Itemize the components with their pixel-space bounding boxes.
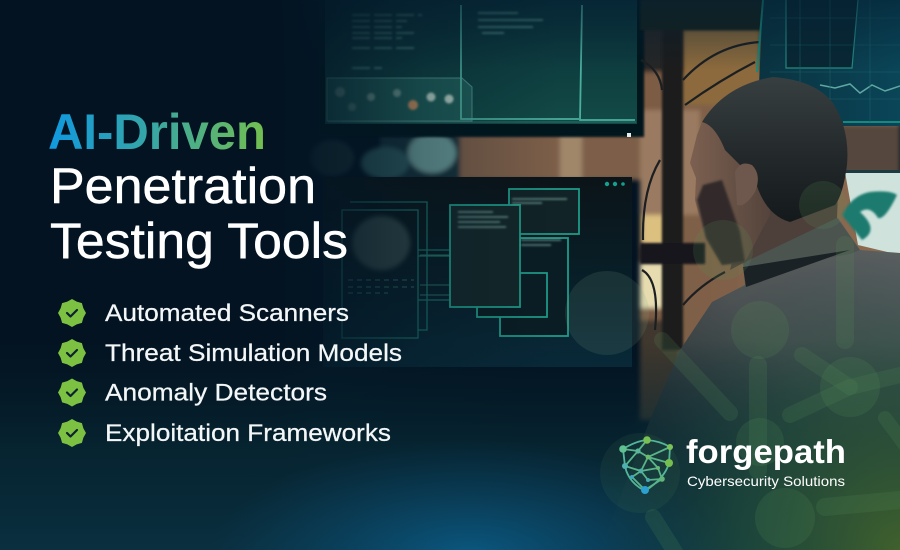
operator collar — [746, 218, 860, 272]
top monitor — [318, 0, 644, 137]
title line: Penetration: Penetration — [50, 158, 316, 214]
operator body — [600, 218, 900, 550]
item: Anomaly Detectors: Anomaly Detectors — [105, 380, 327, 406]
middle monitor — [323, 177, 632, 367]
operator face and beard — [690, 122, 770, 265]
icon: network shield — [619, 436, 673, 494]
operator hair — [702, 77, 847, 222]
title line: AI-Driven: AI-Driven — [48, 104, 266, 160]
title — [48, 104, 348, 269]
item: Threat Simulation Models: Threat Simulation Models — [105, 340, 402, 367]
title line: Testing Tools: Testing Tools — [50, 213, 348, 269]
forgepath logo — [619, 433, 846, 494]
operator neck — [730, 190, 838, 270]
background photo: operator at monitors — [310, 0, 900, 550]
top right monitor — [757, 0, 900, 126]
item: Automated Scanners: Automated Scanners — [105, 300, 349, 327]
pole and cables — [640, 0, 765, 350]
item: Exploitation Frameworks: Exploitation Frameworks — [105, 420, 391, 447]
network pattern overlay — [565, 181, 900, 550]
operator ear — [735, 164, 758, 205]
feature checklist — [58, 299, 402, 447]
logo tagline: Cybersecurity Solutions — [687, 473, 845, 489]
warm room backdrop — [310, 0, 900, 420]
lower right map monitor — [842, 170, 900, 255]
logo wordmark: forgepath — [686, 433, 846, 470]
